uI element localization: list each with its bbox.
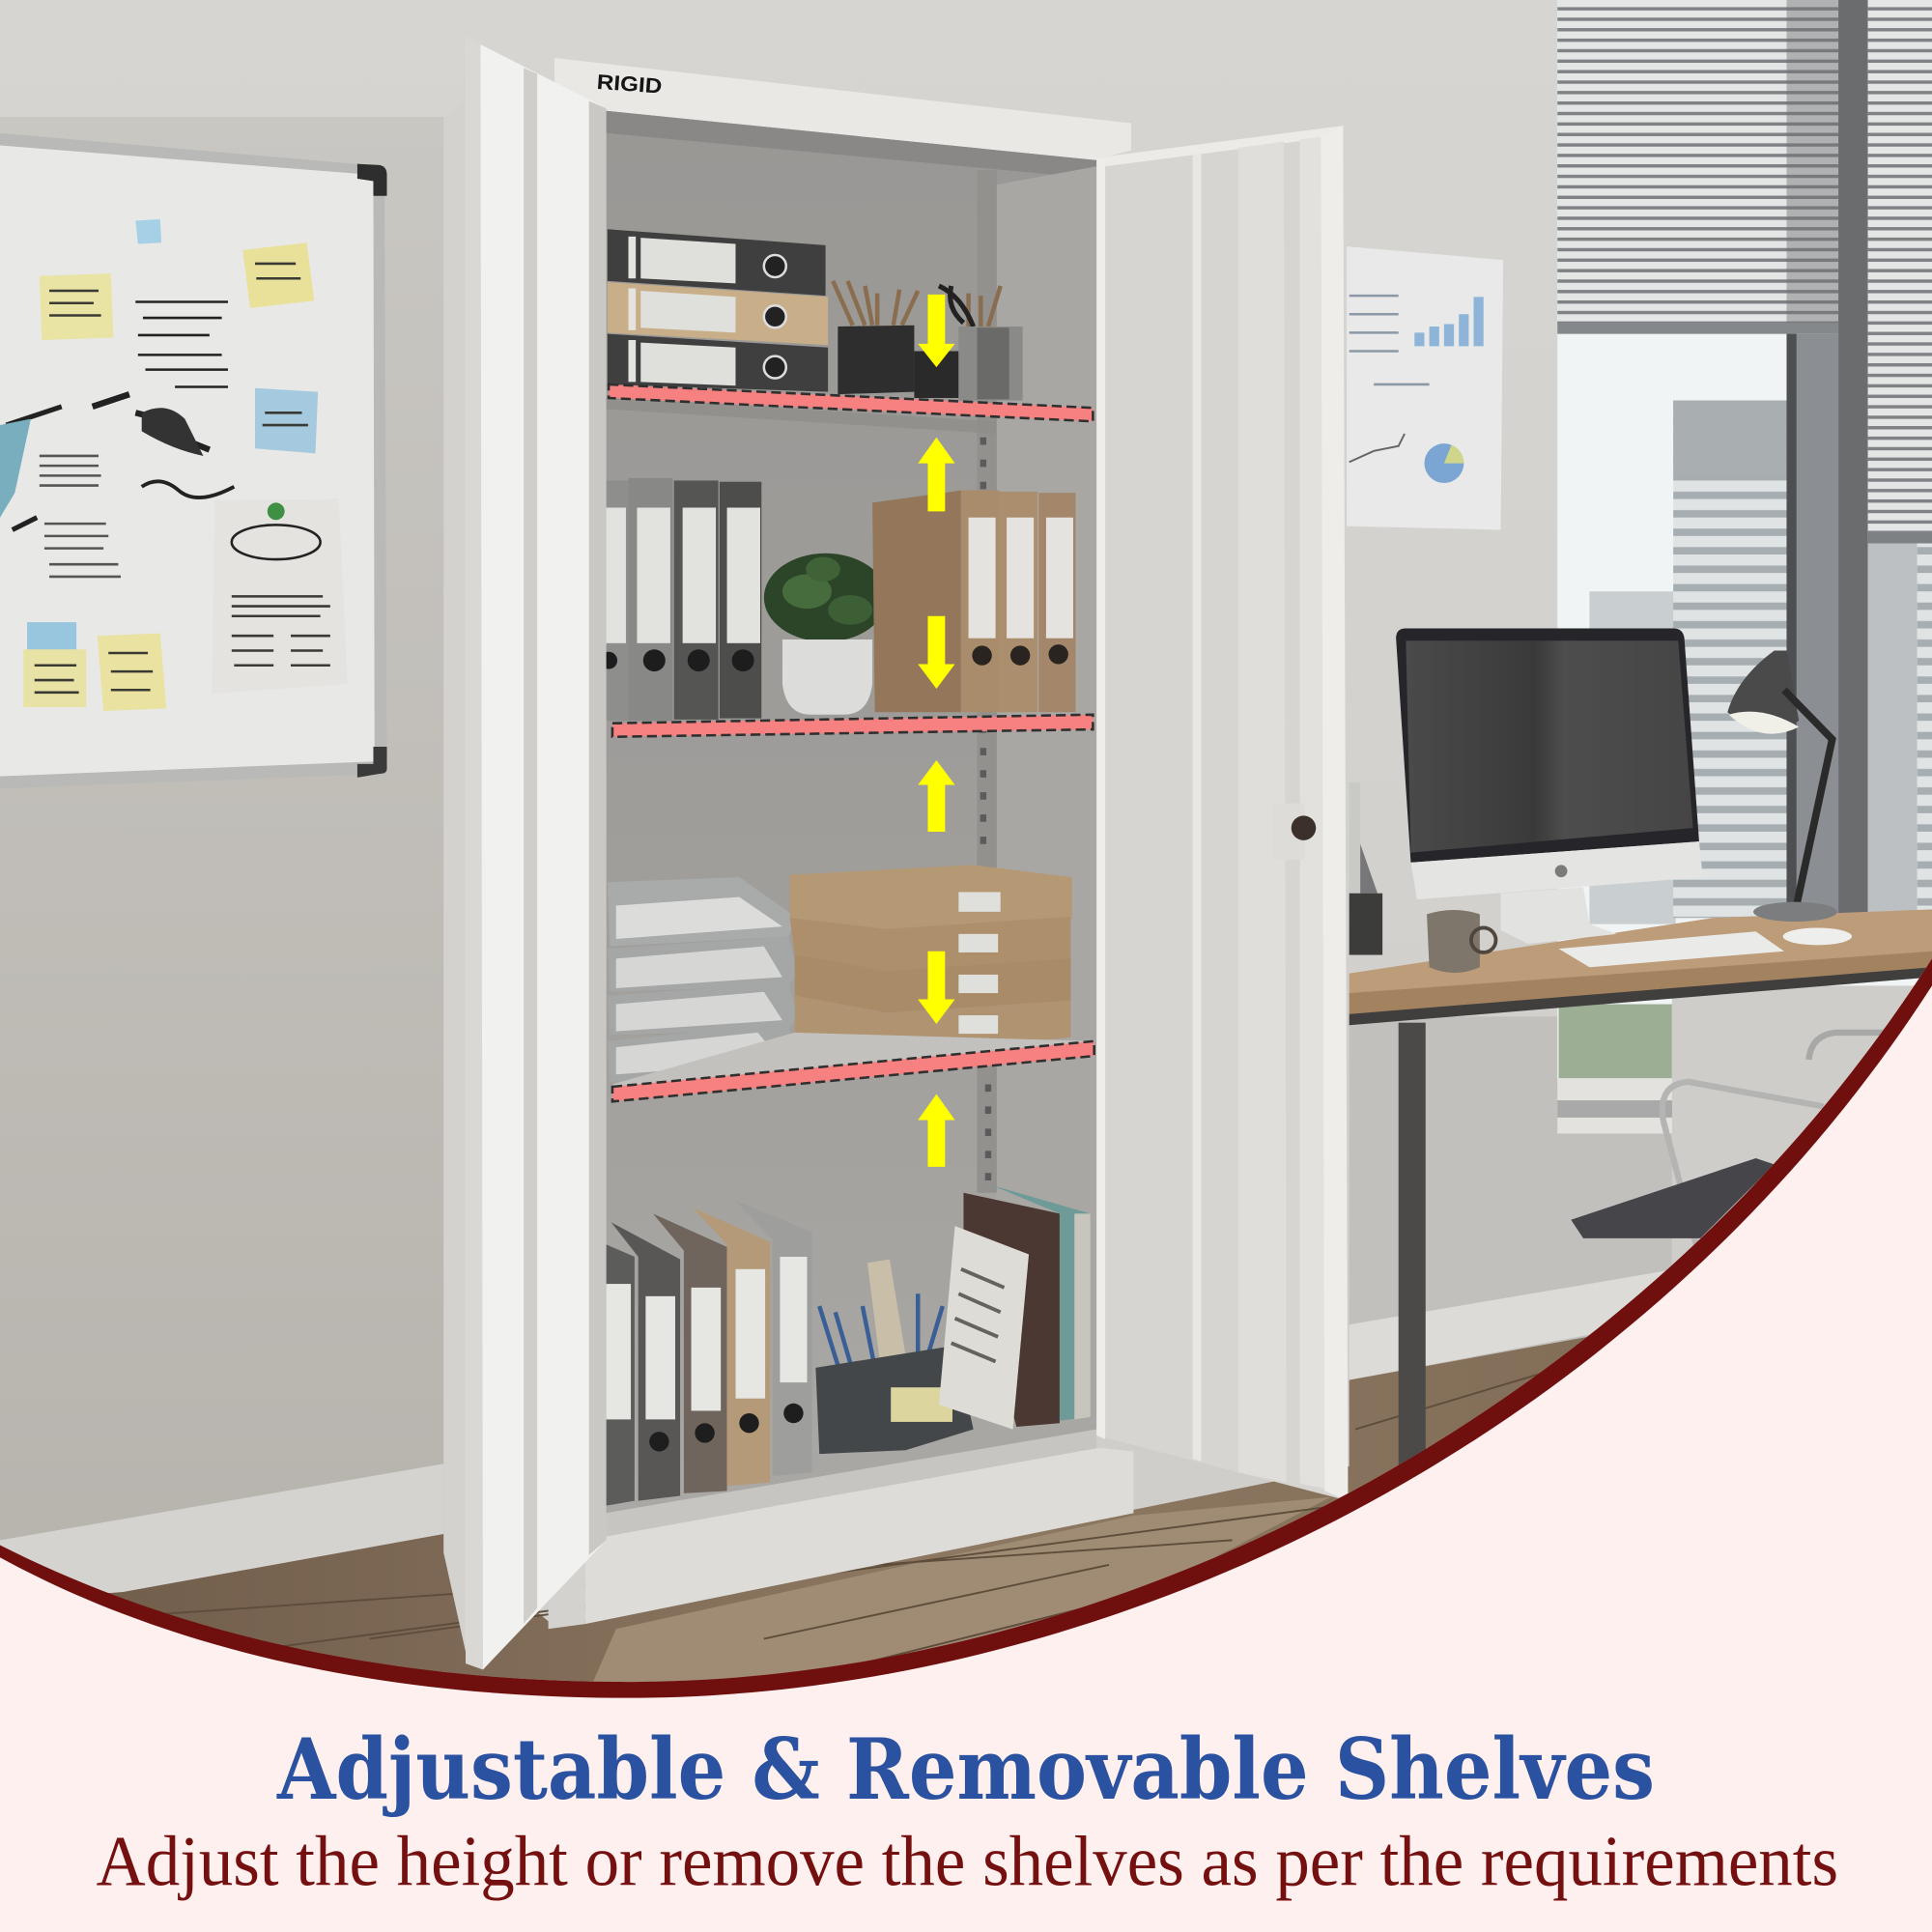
subheading: Adjust the height or remove the shelves as per the requirements xyxy=(96,1823,1838,1902)
whiteboard xyxy=(0,133,387,788)
potted plant xyxy=(763,553,873,715)
base plinth xyxy=(549,1430,1133,1629)
monitor xyxy=(1396,629,1703,944)
arrow down 3 xyxy=(918,952,955,1024)
shelf 4 contents xyxy=(607,1185,1091,1506)
office chair xyxy=(1571,1033,1886,1251)
sticky notes xyxy=(23,219,348,711)
maroon curved band xyxy=(0,958,1932,1698)
cabinet top header xyxy=(554,58,1131,160)
desk organizer xyxy=(815,1260,974,1454)
arrow up 3 xyxy=(918,1094,955,1167)
shelf 2 highlight xyxy=(612,715,1093,737)
shelf 3 highlight xyxy=(612,1041,1094,1101)
shelf surface xyxy=(612,1033,1094,1087)
stacked lever-arch binders xyxy=(608,229,828,392)
slanted binders xyxy=(607,1200,812,1506)
arrow down 2 xyxy=(918,616,955,689)
letter trays xyxy=(608,877,797,1082)
desk accessories xyxy=(1350,782,1852,973)
cabinet side panel xyxy=(443,99,469,1663)
books xyxy=(939,1185,1091,1430)
brand label: RIGID xyxy=(596,70,663,99)
tan binders xyxy=(872,491,1076,712)
wall xyxy=(0,0,1672,1621)
arrow down 1 xyxy=(918,295,955,367)
door lock xyxy=(1273,804,1316,860)
right open door xyxy=(1096,126,1348,1501)
cabinet interior xyxy=(607,111,1096,1513)
shelf 1 contents xyxy=(608,229,1023,401)
shelf 2 contents xyxy=(600,478,1076,721)
wall chart poster xyxy=(1347,246,1503,529)
arrow up 2 xyxy=(918,760,955,832)
left open door xyxy=(466,37,607,1669)
window with blinds xyxy=(1557,0,1932,1355)
desk xyxy=(1350,909,1932,1479)
cardboard boxes xyxy=(790,865,1072,1055)
handwritten sketches xyxy=(6,301,321,577)
shelf 3 contents xyxy=(608,865,1094,1087)
arrow up 1 xyxy=(918,438,955,511)
desk lamp xyxy=(1727,650,1837,922)
grey binders xyxy=(600,478,761,721)
wood floor xyxy=(108,1337,1586,1682)
shelf 1 highlight xyxy=(609,384,1093,421)
heading: Adjustable & Removable Shelves xyxy=(276,1721,1655,1819)
pencil cups xyxy=(833,281,1023,401)
